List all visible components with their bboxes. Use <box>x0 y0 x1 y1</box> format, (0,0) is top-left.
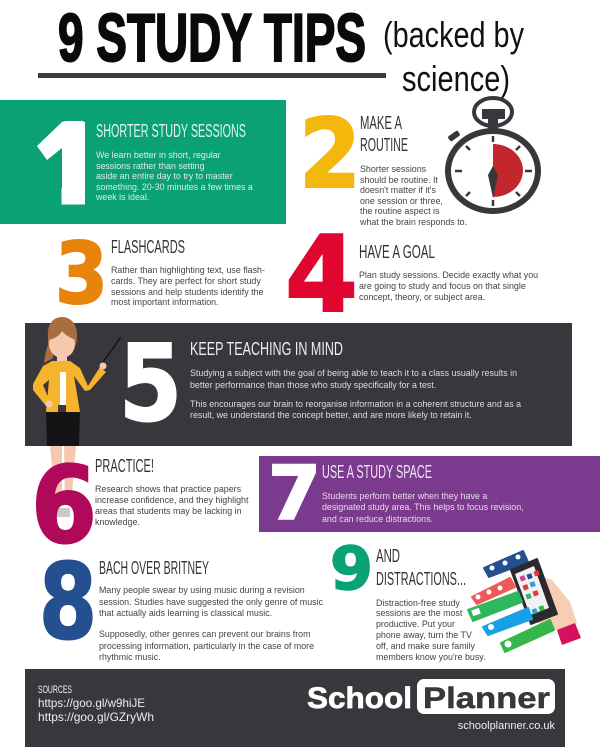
panel: tip 3 flashcards: most important information. <box>111 297 219 307</box>
panel: tip 1 shorter study sessions: sessions rather than setting <box>96 161 205 171</box>
panel: tip 2 make a routine: 2 <box>299 100 361 210</box>
panel: tip 9 distractions: Distraction-free study <box>376 598 460 608</box>
panel: tip 5 keep teaching in mind <box>25 323 572 446</box>
panel: tip 8 bach over britney: processing information, particularly in the case of more <box>99 641 314 651</box>
logo: School Planner <box>307 679 555 732</box>
panel: tip 2 make a routine: what the brain responds to. <box>359 217 467 227</box>
panel: tip 4 have a goal: are going to study and focus on that single <box>359 281 526 291</box>
panel: tip 4 have a goal <box>285 214 538 336</box>
panel: tip 1 shorter study sessions <box>0 100 286 231</box>
title: 9 STUDY TIPS <box>58 0 366 76</box>
sources: SOURCES <box>38 684 72 696</box>
panel: tip 2 make a routine: MAKE A <box>360 113 402 133</box>
sources: https://goo.gl/GZryWh <box>38 710 154 724</box>
panel: tip 9 distractions: off, and make sure family <box>376 641 476 651</box>
panel: tip 2 make a routine: one session or three, <box>360 196 443 206</box>
panel: tip 9 distractions: AND <box>376 546 400 566</box>
panel: tip 3 flashcards: cards. They are perfect for short study <box>111 276 261 286</box>
panel: tip 6 practice: increase confidence, and they highlight <box>95 495 249 505</box>
panel: tip 1 shorter study sessions: aside an entire day to try to master <box>96 171 233 181</box>
sources <box>38 684 154 724</box>
panel: tip 3 flashcards: sessions and help students identify the <box>111 287 264 297</box>
panel: tip 3 flashcards: Rather than highlighting text, use flash- <box>111 265 265 275</box>
panel: tip 9 distractions: members know you're busy. <box>376 652 486 662</box>
illustration: teacher with pointer <box>33 317 121 517</box>
panel: tip 8 bach over britney: BACH OVER BRITNEY <box>99 558 209 578</box>
panel: tip 2 make a routine: should be routine. It <box>360 175 438 185</box>
title: science) <box>402 58 510 99</box>
panel: tip 5 keep teaching in mind: result, we understand the concept better, and are more likely to retain it. <box>190 410 472 420</box>
panel: tip 6 practice: Research shows that practice papers <box>95 484 242 494</box>
panel: tip 5 keep teaching in mind: KEEP TEACHING IN MIND <box>190 339 343 359</box>
panel: tip 9 distractions: DISTRACTIONS... <box>376 569 466 589</box>
panel: tip 4 have a goal: HAVE A GOAL <box>359 242 435 262</box>
panel: tip 3 flashcards: 3 <box>55 225 108 324</box>
panel: tip 6 practice: 6 <box>31 444 97 567</box>
panel: tip 6 practice: knowledge. <box>95 517 140 527</box>
panel: tip 8 bach over britney: Supposedly, other genres can prevent our brains from <box>99 629 310 639</box>
panel: tip 1 shorter study sessions: We learn better in short, regular <box>96 150 221 160</box>
panel: tip 8 bach over britney: session. Studies have suggested the only genre of music <box>99 597 324 607</box>
panel: tip 2 make a routine <box>299 100 467 227</box>
panel: tip 5 keep teaching in mind: Studying a subject with the goal of being able to teach it to a class usually results in <box>190 368 517 378</box>
panel: tip 8 bach over britney: rhythmic music. <box>99 652 161 662</box>
panel: footer <box>25 669 565 747</box>
panel: tip 7 use a study space <box>259 451 600 537</box>
panel: tip 6 practice: areas that students may be lacking in <box>95 506 242 516</box>
panel: tip 4 have a goal: concept, theory, or subject area. <box>359 292 485 302</box>
panel: tip 2 make a routine: ROUTINE <box>360 135 408 155</box>
panel: tip 9 distractions <box>330 534 486 662</box>
panel: tip 3 flashcards: FLASHCARDS <box>111 237 185 257</box>
panel: tip 7 use a study space: USE A STUDY SPACE <box>322 462 432 482</box>
panel: tip 7 use a study space: and can reduce distractions. <box>322 514 433 524</box>
panel: tip 1 shorter study sessions: something. 20-30 minutes a few times a <box>96 182 253 192</box>
panel: tip 4 have a goal: 4 <box>285 214 358 336</box>
panel: tip 7 use a study space: designated study area. This helps to focus revision, <box>322 502 524 512</box>
icon: stopwatch <box>447 98 538 211</box>
panel: tip 9 distractions: phone away, turn the TV <box>376 630 472 640</box>
panel: tip 1 shorter study sessions: 1 <box>39 101 105 231</box>
panel: tip 5 keep teaching in mind: 5 <box>119 323 182 445</box>
panel: tip 8 bach over britney: that actually aids learning is classical music. <box>99 608 272 618</box>
panel: tip 5 keep teaching in mind: better performance than those who study specifically for a test. <box>190 380 436 390</box>
panel: tip 9 distractions: productive. Put your <box>376 619 455 629</box>
panel: tip 6 practice: PRACTICE! <box>95 456 154 476</box>
panel: tip 8 bach over britney: 8 <box>39 541 97 663</box>
panel: tip 9 distractions: 9 <box>330 534 373 604</box>
panel: tip 2 make a routine: the routine aspect is <box>360 206 440 216</box>
panel: tip 3 flashcards <box>55 225 265 324</box>
logo: School Planner: Planner <box>423 682 550 715</box>
sources: https://goo.gl/w9hiJE <box>38 696 145 710</box>
panel: tip 8 bach over britney: Many people swear by using music during a revision <box>99 585 305 595</box>
panel: tip 1 shorter study sessions: SHORTER STUDY SESSIONS <box>96 121 246 141</box>
logo: School Planner: schoolplanner.co.uk <box>458 720 555 732</box>
panel: tip 4 have a goal: Plan study sessions. Decide exactly what you <box>359 270 538 280</box>
panel: tip 6 practice <box>31 444 249 567</box>
panel: tip 9 distractions: sessions are the most <box>376 608 463 618</box>
logo: School Planner: School <box>307 682 412 715</box>
panel: tip 7 use a study space: Students perform better when they have a <box>322 491 487 501</box>
panel: tip 1 shorter study sessions: week is ideal. <box>95 192 149 202</box>
panel: tip 7 use a study space: 7 <box>268 451 321 537</box>
title: (backed by <box>383 14 524 55</box>
panel: tip 2 make a routine: Shorter sessions <box>360 164 427 174</box>
panel: tip 2 make a routine: doesn't matter if it's <box>360 185 436 195</box>
icon: phone with notifications <box>468 551 581 652</box>
panel: tip 8 bach over britney <box>39 541 324 663</box>
panel: tip 5 keep teaching in mind: This encourages our brain to reorganise information in a coherent structure and as a <box>190 399 521 409</box>
